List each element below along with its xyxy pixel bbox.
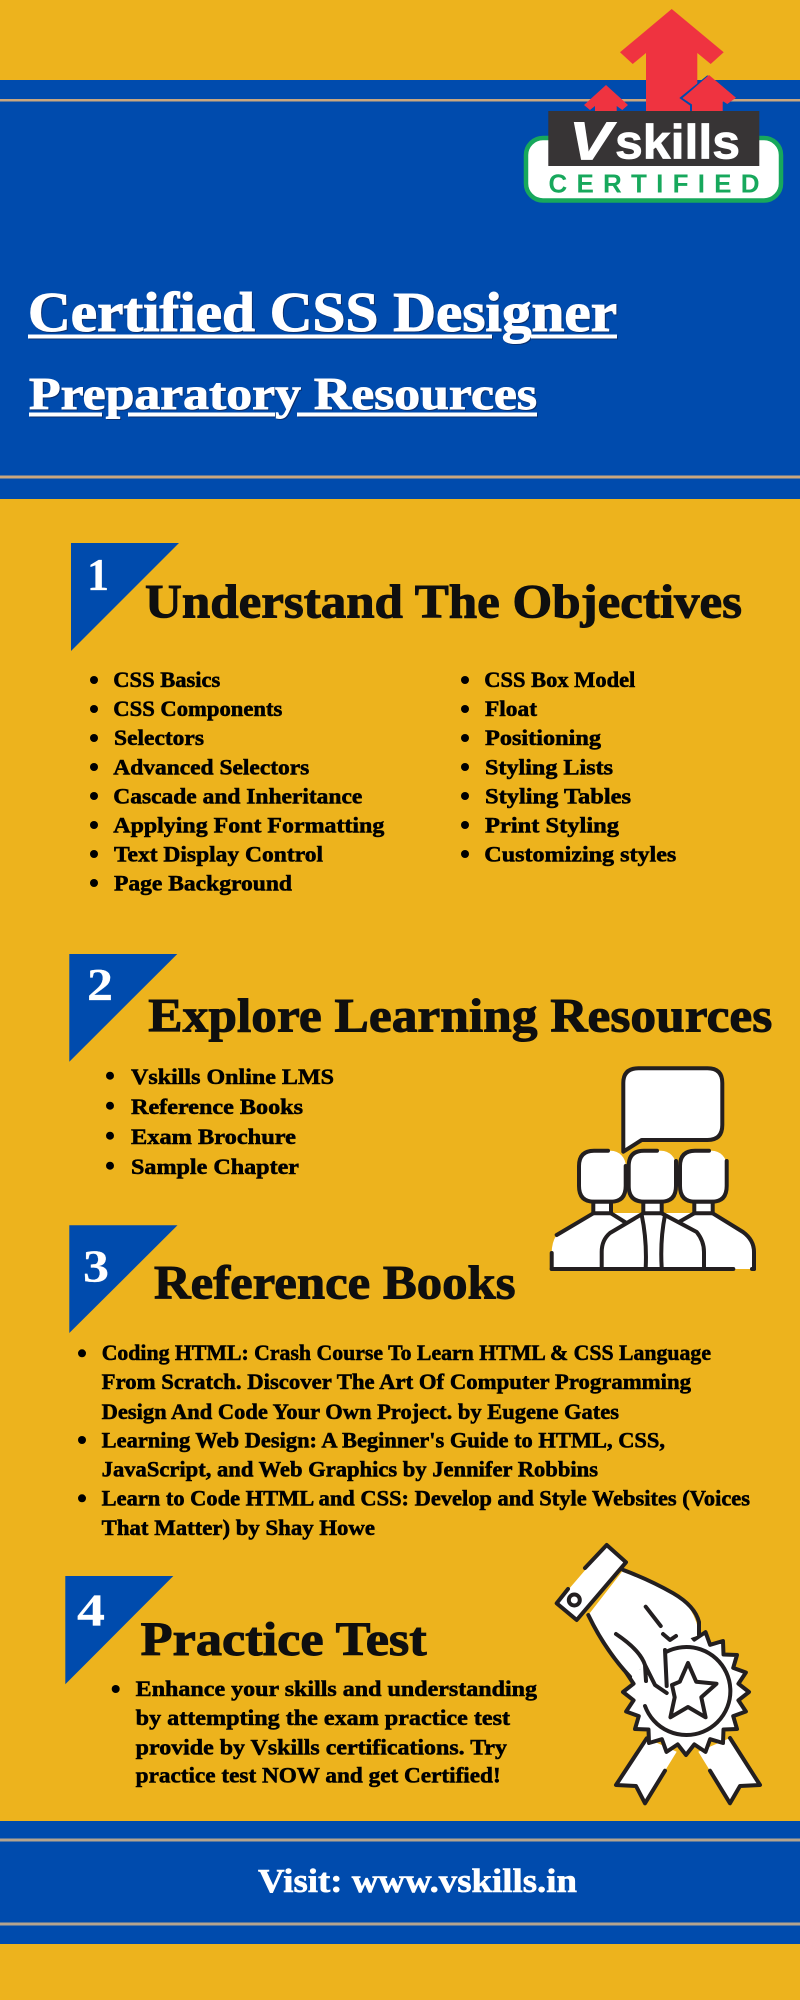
cuff [557, 1545, 626, 1620]
list: reference books: Learn to Code HTML and CSS: Develop and Style Websites (Voices [102, 1486, 750, 1511]
list: objectives left column: Text Display Control [114, 842, 323, 866]
list: objectives left column: Cascade and Inheritance [113, 784, 363, 808]
list: objectives left column: Selectors [114, 725, 204, 750]
logo: dark name plate [548, 111, 759, 166]
list: reference books: Design And Code Your Own Project. by Eugene Gates [102, 1399, 619, 1424]
icon: big red arrow [620, 9, 724, 112]
list: learning resources: Vskills Online LMS [131, 1064, 334, 1089]
number badge 1: 1 [87, 549, 109, 600]
section 1: Understand The Objectives [71, 543, 742, 896]
heading 2: Explore Learning Resources [148, 990, 772, 1043]
list: objectives right column: Styling Lists [485, 754, 613, 780]
icon: hand holding award rosette [557, 1545, 760, 1803]
panel: header band [0, 80, 800, 499]
heading 1: Understand The Objectives [145, 576, 742, 629]
list: objectives left column: Applying Font Formatting [113, 812, 384, 838]
list: objectives left column: Page Background [114, 871, 292, 896]
right person [679, 1151, 754, 1269]
list: objectives right column [461, 667, 677, 866]
list: objectives right column: Print Styling [485, 812, 619, 838]
text block: practice test description: by attempting the exam practice test [136, 1705, 511, 1730]
star [670, 1663, 716, 1717]
list: reference books: From Scratch. Discover The Art Of Computer Programming [102, 1369, 691, 1394]
title line 2 underline [29, 412, 537, 416]
logo: green rounded badge [526, 138, 781, 200]
list: reference books: Learning Web Design: A Beginner's Guide to HTML, CSS, [102, 1428, 665, 1453]
list: objectives right column: CSS Box Model [484, 667, 635, 692]
logo: V letter: V [569, 111, 617, 171]
list: reference books: Coding HTML: Crash Course To Learn HTML & CSS Language [102, 1340, 711, 1365]
list: objectives right column: Float [485, 696, 538, 721]
footer link text: Visit: www.vskills.in [258, 1863, 577, 1900]
middle person [602, 1151, 704, 1269]
logo: Vskills Certified [526, 9, 781, 200]
number badge 4: 4 [77, 1585, 105, 1636]
white body fills [552, 1213, 754, 1269]
left person [552, 1151, 628, 1269]
icon: small left arrow [584, 85, 628, 112]
logo: certified word: CERTIFIED [548, 169, 760, 199]
number badge 3 [69, 1225, 178, 1333]
list: reference books: JavaScript, and Web Graphics by Jennifer Robbins [102, 1457, 598, 1482]
left ribbon [616, 1738, 677, 1803]
rosette [623, 1629, 749, 1755]
number badge 3: 3 [83, 1241, 109, 1292]
title line 2: Preparatory Resources [29, 368, 537, 419]
hand [588, 1570, 699, 1693]
list: learning resources: Exam Brochure [131, 1124, 296, 1149]
title line 1: Certified CSS Designer [28, 282, 617, 344]
ground line [552, 1267, 754, 1271]
heading 3: Reference Books [154, 1256, 516, 1309]
text block: practice test description: provide by Vskills certifications. Try [136, 1734, 507, 1759]
list: objectives right column: Positioning [485, 725, 601, 750]
number badge 2: 2 [87, 959, 113, 1010]
text block: practice test description [112, 1676, 537, 1788]
title line 1 underline [28, 334, 617, 338]
number badge 1 [71, 543, 179, 651]
rosette inner ring [645, 1647, 730, 1735]
list: objectives right column: Customizing styles [484, 842, 677, 866]
section 2: Explore Learning Resources [69, 954, 772, 1269]
heading 4: Practice Test [141, 1613, 427, 1666]
list: objectives left column: CSS Basics [113, 667, 221, 692]
list: learning resources: Reference Books [131, 1094, 303, 1119]
section 4: Practice Test [65, 1545, 760, 1803]
number badge 4 [65, 1576, 173, 1684]
speech bubble [623, 1068, 722, 1152]
list: objectives left column [90, 667, 384, 896]
icon: small right arrow [681, 75, 736, 112]
list: objectives left column: Advanced Selectors [113, 754, 310, 780]
list: objectives right column: Styling Tables [485, 784, 631, 808]
icon: group of people with speech bubble [552, 1068, 754, 1269]
number badge 2 [69, 954, 177, 1062]
list: learning resources [106, 1064, 334, 1179]
list: reference books [78, 1340, 750, 1540]
text block: practice test description: Enhance your skills and understanding [136, 1676, 537, 1701]
list: learning resources: Sample Chapter [131, 1154, 299, 1179]
title block [28, 282, 617, 419]
section 3: Reference Books [69, 1225, 750, 1540]
list: reference books: That Matter) by Shay Howe [102, 1515, 375, 1540]
list: objectives left column: CSS Components [113, 696, 283, 721]
text block: practice test description: practice test NOW and get Certified! [136, 1763, 501, 1788]
logo: skills word: skills [615, 116, 740, 169]
panel: footer band [0, 1821, 800, 1944]
right ribbon [698, 1738, 760, 1803]
